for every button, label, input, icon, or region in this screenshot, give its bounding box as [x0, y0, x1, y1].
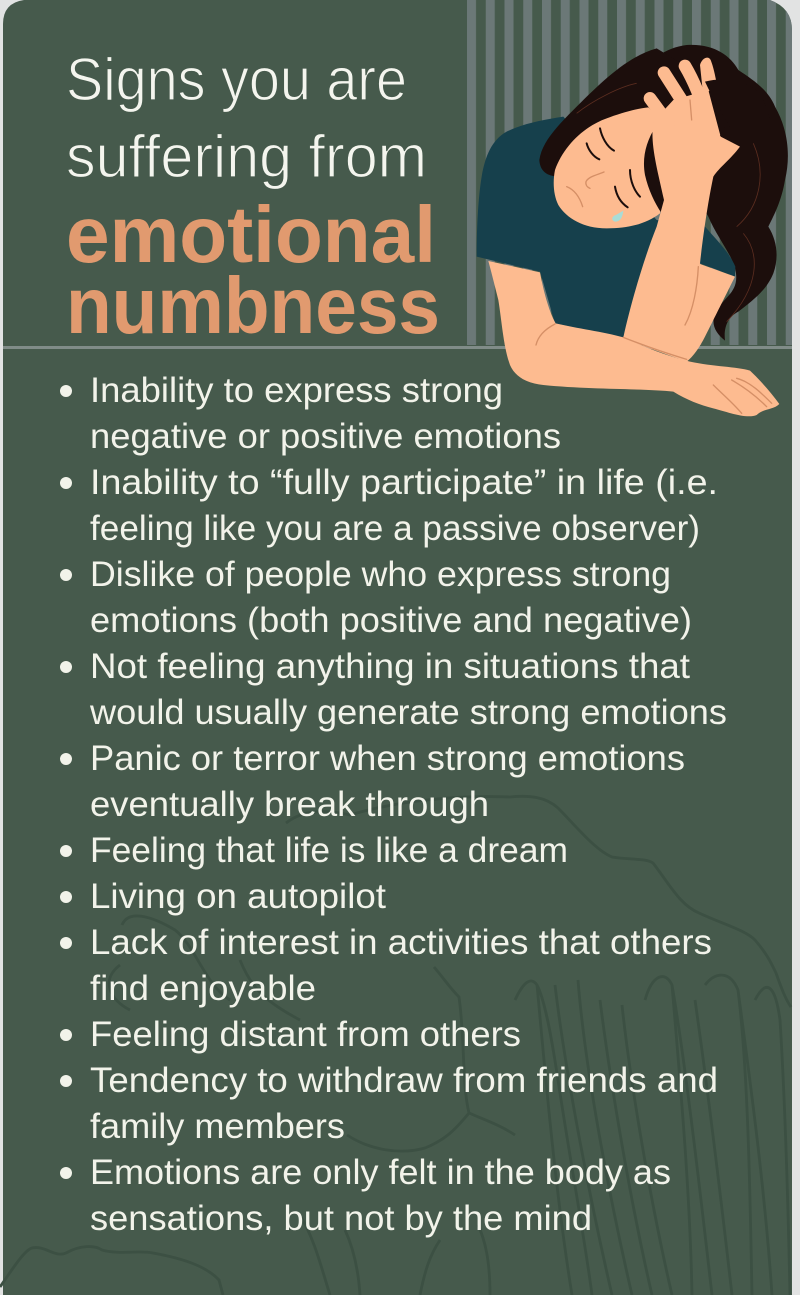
list text: sensations, but not by the mind: [90, 1199, 592, 1238]
heading bold text: numbness: [66, 261, 440, 350]
background wall stripes: [467, 0, 792, 345]
list text: emotions (both positive and negative): [90, 601, 692, 640]
faint background line art: [0, 796, 791, 1295]
heading light text: suffering from: [66, 123, 427, 190]
face: [554, 107, 667, 228]
list text: Dislike of people who express strong: [90, 555, 671, 594]
hair back: [627, 45, 788, 341]
hair over hand: [705, 79, 772, 147]
list text: Tendency to withdraw from friends and: [90, 1061, 718, 1100]
fingers: [650, 66, 705, 123]
list text: family members: [90, 1107, 345, 1146]
hair around the face: [539, 48, 687, 177]
list text: Not feeling anything in situations that: [90, 647, 690, 686]
list text: Emotions are only felt in the body as: [90, 1153, 671, 1192]
list text: Inability to express strong: [90, 371, 503, 410]
list text: [89, 371, 727, 1238]
heading bold text: emotional: [66, 190, 436, 279]
list text: negative or positive emotions: [90, 417, 561, 456]
facial lines: [587, 128, 640, 207]
list text: find enjoyable: [90, 969, 316, 1008]
symptom list: [60, 371, 727, 1238]
title: [66, 46, 440, 350]
hair fringe: [644, 125, 665, 212]
heading light text: [66, 46, 427, 190]
bullet markers: [60, 385, 72, 1179]
list text: Lack of interest in activities that others: [90, 923, 712, 962]
list text: feeling like you are a passive observer): [90, 509, 700, 548]
list text: Inability to “fully participate” in life (i.e.: [90, 463, 718, 502]
raised forearm and palm: [623, 90, 740, 359]
hair strands: [577, 83, 760, 322]
mouth and nose: [536, 100, 772, 413]
list text: Feeling distant from others: [90, 1015, 521, 1054]
list text: Feeling that life is like a dream: [90, 831, 568, 870]
icon: sad woman illustration: [477, 45, 788, 416]
list text: Panic or terror when strong emotions: [90, 739, 685, 778]
heading bold text: [66, 190, 440, 350]
lying arm and hand: [488, 261, 779, 416]
little finger: [700, 58, 717, 97]
shirt: [477, 117, 735, 338]
list text: Living on autopilot: [90, 877, 386, 916]
upper arm behind: [627, 263, 735, 362]
list text: would usually generate strong emotions: [89, 693, 727, 732]
tear: [612, 211, 623, 222]
heading light text: Signs you are: [66, 46, 407, 113]
floor line: [3, 346, 792, 349]
list text: eventually break through: [90, 785, 489, 824]
